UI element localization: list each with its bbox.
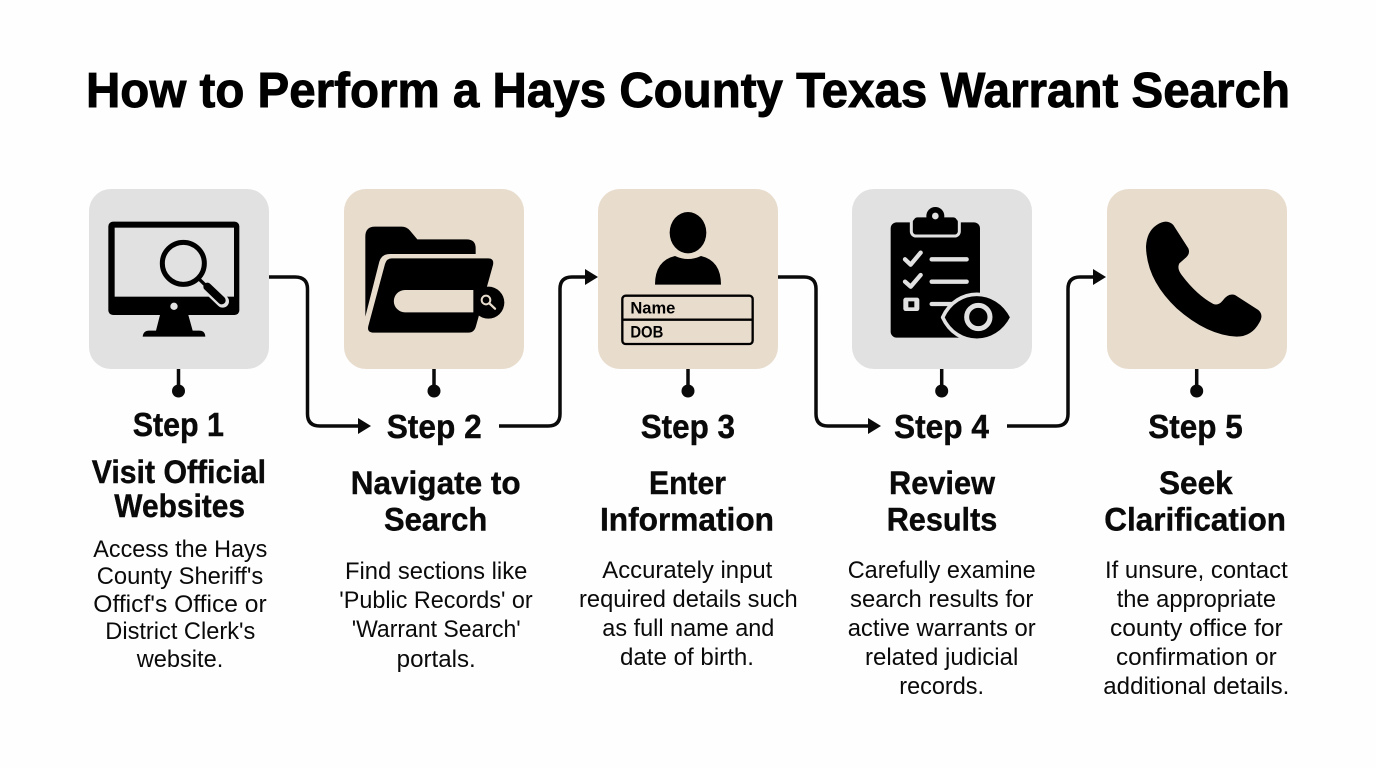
arrow: step 1 to step 2 <box>269 277 371 434</box>
step label: Step 1 <box>133 406 224 443</box>
step description: confirmation or <box>1116 644 1277 671</box>
panel: step 4 <box>848 189 1036 700</box>
connector dot <box>1190 369 1203 398</box>
connector dot <box>935 369 948 398</box>
step heading: Seek <box>1159 465 1233 501</box>
step description: 'Public Records' or <box>339 587 533 614</box>
arrow: step 4 to step 5 <box>1007 269 1106 426</box>
step description: Accurately input <box>602 557 773 584</box>
step heading: Navigate to <box>351 465 521 501</box>
step description <box>579 557 798 671</box>
step heading: Enter <box>649 465 726 501</box>
step heading: Clarification <box>1104 502 1286 538</box>
step heading: Visit Official <box>92 454 266 490</box>
icon card: person with form: DOB <box>630 324 664 342</box>
panel: step 2 <box>339 189 533 673</box>
icon card: person with form: Name <box>630 300 675 318</box>
panel: step 5 <box>1103 189 1289 700</box>
step description: additional details. <box>1103 673 1289 700</box>
connector dot <box>172 369 185 398</box>
step heading: Information <box>600 502 774 538</box>
step description: Find sections like <box>345 558 527 585</box>
icon card: person with form <box>598 189 778 369</box>
step heading <box>92 454 266 524</box>
step description: If unsure, contact <box>1105 557 1288 584</box>
step description: Officf's Office or <box>93 591 267 618</box>
step description: 'Warrant Search' <box>352 616 521 643</box>
step description: the appropriate <box>1117 586 1276 613</box>
step description: required details such <box>579 586 798 613</box>
step label: Step 3 <box>641 408 735 445</box>
connector dot <box>428 369 440 398</box>
step heading <box>351 465 521 538</box>
step description: Carefully examine <box>848 557 1036 584</box>
connector dot <box>682 369 694 398</box>
step description: District Clerk's <box>105 618 255 645</box>
step heading <box>600 465 774 538</box>
step description: as full name and <box>602 615 774 642</box>
icon card: monitor with magnifier <box>89 189 269 369</box>
title: How to Perform a Hays County Texas Warrant Search <box>86 64 1290 118</box>
step heading: Search <box>384 502 487 538</box>
arrow: step 2 to step 3 <box>499 269 598 426</box>
step heading <box>1104 465 1286 538</box>
step description: date of birth. <box>620 644 754 671</box>
step description: county office for <box>1110 615 1283 642</box>
panel: step 1 <box>89 189 269 673</box>
step label: Step 5 <box>1148 408 1243 445</box>
step description: active warrants or <box>848 615 1036 642</box>
step heading: Review <box>889 465 995 501</box>
step description <box>848 557 1036 700</box>
icon card: folder with search <box>344 189 524 369</box>
step label: Step 2 <box>387 408 482 445</box>
step heading: Websites <box>114 488 245 524</box>
step description <box>1103 557 1289 700</box>
arrow: step 3 to step 4 <box>778 277 881 434</box>
icon card: telephone <box>1107 189 1287 369</box>
step description: portals. <box>397 646 476 673</box>
step description: related judicial <box>865 644 1018 671</box>
step description: website. <box>136 646 223 673</box>
step description: records. <box>899 673 984 700</box>
step description: Access the Hays <box>93 536 267 563</box>
step heading: Results <box>887 502 997 538</box>
step heading <box>887 465 997 538</box>
step description: search results for <box>850 586 1033 613</box>
panel: step 3 <box>579 189 798 671</box>
step description <box>339 558 533 673</box>
icon card: clipboard with eye <box>852 189 1032 369</box>
step description: County Sheriff's <box>97 563 263 590</box>
step label: Step 4 <box>894 408 990 445</box>
step description <box>93 536 267 673</box>
